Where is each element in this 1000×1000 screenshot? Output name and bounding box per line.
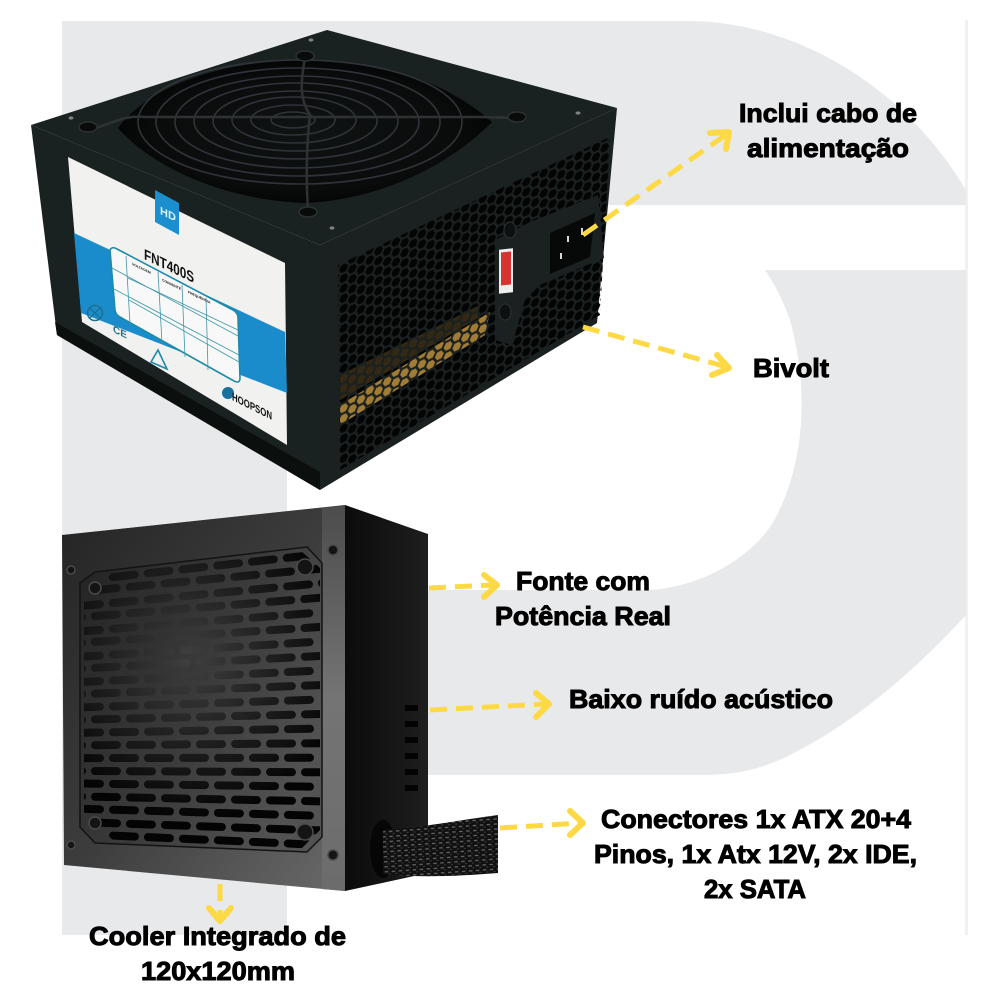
arrow: power cable [583,132,729,235]
arrow: bivolt [583,327,729,375]
brand name: HOOPSON [232,391,272,423]
power socket [550,213,595,274]
left face with label [31,125,320,490]
label: real power: Fonte com [516,566,650,596]
label: connectors: Conectores 1x ATX 20+4 [601,804,912,834]
label: connectors [594,804,917,904]
fan guard wires [90,58,517,212]
product: modular power supply, fan side [60,505,498,891]
label: low noise: Baixo ruído acústico [569,684,833,714]
right face with honeycomb vent and power socket [320,108,617,490]
label: power cable [739,98,917,163]
label: real power [495,566,671,631]
label: connectors: Pinos, 1x Atx 12V, 2x IDE, [594,839,917,869]
label: cooler: Cooler Integrado de [89,921,346,951]
label: bivolt: Bivolt [753,353,829,383]
label: connectors: 2x SATA [704,874,806,904]
honeycomb vent [338,137,610,470]
lit right edge [322,505,345,891]
label: cooler: 120x120mm [141,956,295,986]
panel screws [504,222,516,238]
arrow: cooler [209,884,231,921]
fan grille [138,60,462,184]
specification table: FREQUÊNCIA [188,289,211,305]
screws [79,51,526,217]
label: real power: Potência Real [495,601,671,631]
certification icons: CE [113,323,127,342]
brand logo glyph: HD [160,205,176,224]
arrow: real power [429,575,497,597]
braided cable [370,815,498,878]
certification icons [88,306,167,369]
grille slots [60,554,322,845]
label: cooler [89,921,346,986]
blue band [74,233,287,393]
product: black power supply FNT400S [31,30,617,490]
logo square [155,190,179,235]
label: power cable: Inclui cabo de [739,98,917,128]
gold components behind the vent [340,305,490,425]
top face with fan [31,30,617,245]
arrow: low noise [430,693,549,717]
voltage switch [499,248,513,294]
front panel [62,505,345,891]
socket plate [495,195,604,345]
model name: FNT400S [144,247,194,287]
white label [68,157,287,445]
plate screws [67,545,338,860]
specification table: VOLTAGEM [132,262,151,275]
fan housing [118,60,492,203]
brand name [222,387,272,423]
side vents [405,705,418,791]
arrow: connectors [500,811,583,835]
label: power cable: alimentação [747,133,909,163]
specification table [110,248,240,382]
specification table: CORRENTE [162,278,182,291]
fan plate [80,547,322,852]
side panel [345,505,428,891]
